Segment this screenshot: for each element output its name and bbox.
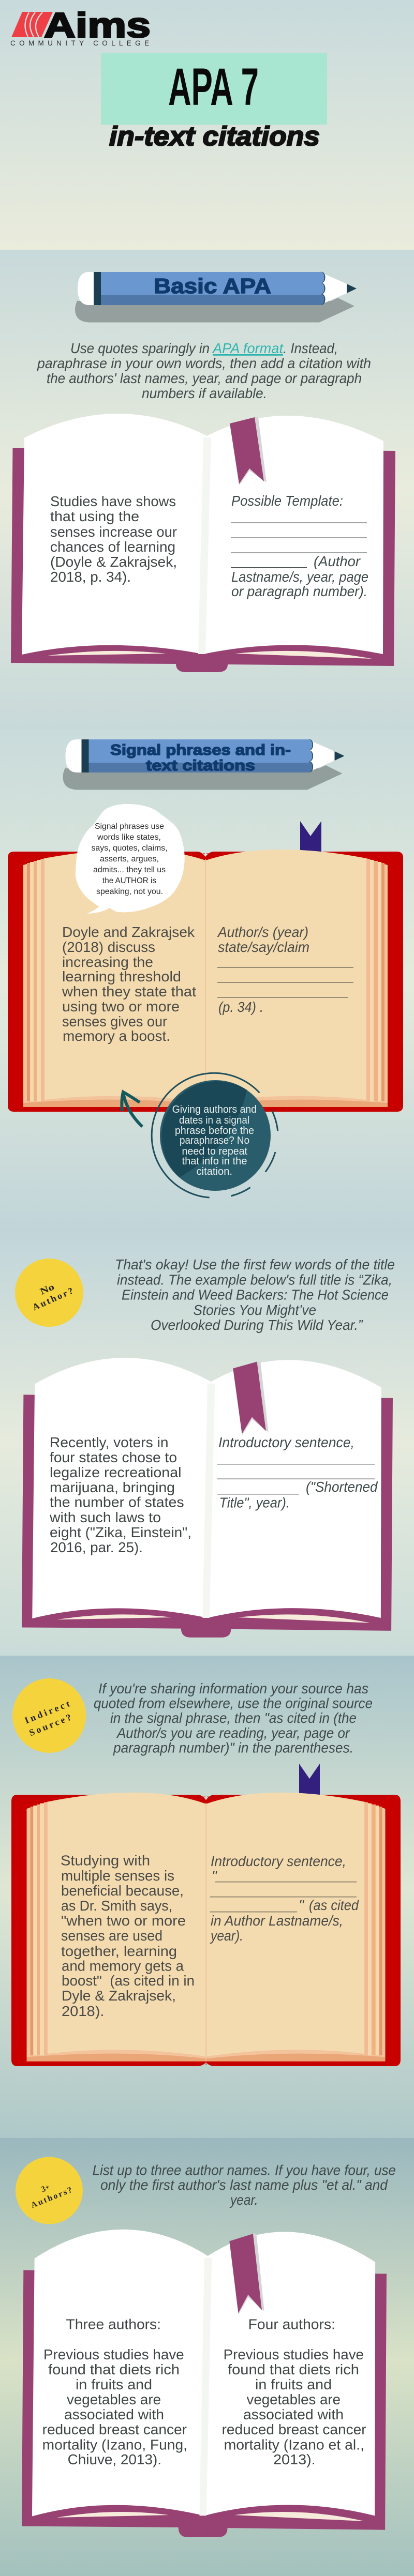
book text: indirect source example: Dyle & Zakrajsek, (62, 1988, 176, 2004)
bookmark: navy ribbon (299, 1764, 320, 1796)
pencil heading: signal phrases and in-text citations: Signal phrases and in- (110, 742, 291, 759)
speech bubble: signal phrases: says, quotes, claims, (91, 844, 168, 853)
speech bubble: signal phrases: asserts, argues, (100, 855, 159, 863)
book text: four authors: Four authors: (248, 2316, 335, 2332)
book text: signal phrase example: using two or more (62, 998, 180, 1014)
intro paragraph: Einstein and Weed Backers: The Hot Science (122, 1287, 389, 1303)
book text: indirect source template: in Author Lastname/s, (211, 1913, 343, 1929)
background: basic APA band (0, 250, 414, 730)
badge: No Author? (15, 1259, 83, 1327)
badge: No Author?: No (38, 1281, 56, 1297)
intro paragraph: . Instead, (283, 340, 338, 356)
book text: indirect source template: (as cited (309, 1897, 359, 1913)
book text: indirect source example: Studying with (61, 1853, 150, 1869)
book text: no author example: with such laws to (49, 1509, 161, 1525)
book text: indirect source example: boost" (as cited in in (62, 1973, 195, 1989)
book text: signal phrase example: increasing the (62, 954, 153, 970)
book text: four authors: mortality (Izano et al., (224, 2437, 364, 2453)
book text: four authors (222, 2316, 366, 2467)
logo: Aims Community College (10, 6, 151, 47)
book text: three authors: Three authors: (66, 2316, 161, 2332)
book text: signal phrase template (217, 924, 353, 1015)
book text: indirect source example: "when two or more (61, 1913, 186, 1929)
book text: indirect source example: 2018). (62, 2003, 105, 2019)
book text: example citation: senses increase our (50, 524, 177, 540)
book text: signal phrase template: state/say/claim (218, 939, 309, 955)
intro paragraph: the authors' last names, year, and page or paragraph (47, 370, 362, 386)
book text: four authors: Previous studies have (224, 2346, 364, 2362)
book text: signal phrase example: learning threshold (62, 968, 181, 984)
subtitle: in-text citations: in-text citations (109, 122, 320, 151)
book text: no author example: four states chose to (50, 1449, 177, 1465)
intro paragraph: Overlooked During This Wild Year.” (151, 1317, 363, 1333)
book text: three authors: found that diets rich (48, 2361, 180, 2377)
book text: possible template: (Author (314, 553, 361, 569)
intro paragraph: paraphrase in your own words, then add a citation with (37, 355, 371, 371)
panel: indirect source (11, 1678, 401, 2066)
background: indirect source band (0, 1656, 414, 2138)
book text: signal phrase example: when they state that (62, 983, 196, 999)
intro paragraph: List up to three author names. If you have four, use (93, 2162, 396, 2178)
pencil heading: Basic APA (75, 272, 357, 323)
book text: indirect source example: and memory gets a (62, 1958, 184, 1974)
book text: indirect source template (210, 1853, 359, 1944)
book text: three authors: mortality (Izano, Fung, (42, 2437, 187, 2453)
book: purple open book (11, 414, 395, 672)
book: red open book (8, 850, 403, 1112)
book text: example citation: Studies have shows (50, 493, 176, 509)
book text: indirect source example: beneficial because, (61, 1883, 184, 1899)
book text: three authors: in fruits and (76, 2376, 152, 2392)
book text: example citation: (Doyle & Zakrajsek, (50, 554, 177, 570)
book text: signal phrase example: Doyle and Zakrajsek (62, 924, 195, 940)
badge: Indirect Source?: Indirect (23, 1698, 71, 1726)
book text: indirect source example: together, learning (61, 1943, 177, 1959)
book text: four authors: reduced breast cancer (222, 2421, 366, 2437)
book text: indirect source example: senses are used (61, 1928, 162, 1944)
badge: 3+ Authors?: Authors? (30, 2186, 73, 2210)
callout: no need to repeat: need to repeat (182, 1146, 247, 1157)
book text: no author template (217, 1434, 378, 1511)
speech bubble: signal phrases: speaking, not you. (96, 887, 163, 896)
book: purple open book (22, 1358, 393, 1638)
intro paragraph: in the signal phrase, then "as cited in (the (110, 1710, 357, 1726)
book text: four authors: 2013). (273, 2451, 316, 2467)
speech bubble: signal phrases: the AUTHOR is (102, 876, 156, 885)
book text: example citation: that using the (50, 508, 139, 524)
intro paragraph: That's okay! Use the first few words of the title (115, 1256, 395, 1272)
book text: possible template: Lastname/s, year, page (231, 569, 368, 585)
speech bubble: signal phrases: words like states, (97, 833, 161, 842)
panel: no author (15, 1256, 395, 1638)
panel: three plus authors (16, 2157, 396, 2537)
book text: indirect source example (61, 1853, 195, 2019)
badge: Indirect Source? (12, 1678, 86, 1753)
book text: no author template: Introductory sentence, (218, 1434, 354, 1450)
background: three plus authors band (0, 2138, 414, 2576)
book text: indirect source template: " (299, 1897, 304, 1913)
book text: four authors: in fruits and (255, 2376, 332, 2392)
book text: indirect source example: multiple senses is (61, 1868, 174, 1884)
callout: no need to repeat: that info in the (182, 1156, 247, 1167)
pencil heading: signal phrases and in-text citations: text citations (146, 757, 255, 774)
panel: basic APA (11, 272, 395, 672)
book text: no author example: 2016, par. 25). (50, 1539, 143, 1555)
speech bubble: signal phrases (76, 804, 185, 914)
book: red open book (11, 1793, 401, 2066)
intro paragraph: paragraph number)" in the parentheses. (113, 1739, 353, 1756)
book text: no author example: eight ("Zika, Einstein", (50, 1524, 191, 1540)
intro paragraph: numbers if available. (142, 385, 267, 401)
badge: No Author?: Author? (31, 1285, 75, 1312)
intro paragraph: only the first author's last name plus "et al." and (100, 2177, 388, 2193)
book text: no author example: marijuana, bringing (50, 1479, 175, 1495)
book text: possible template (231, 493, 368, 599)
book text: signal phrase example: memory a boost. (63, 1028, 170, 1044)
book text: indirect source template: year). (210, 1928, 243, 1944)
book text: example citation: chances of learning (50, 539, 175, 555)
book text: indirect source example: as Dr. Smith says, (61, 1898, 172, 1914)
panel: signal phrases (8, 739, 403, 1198)
intro paragraph: quoted from elsewhere, use the original source (94, 1695, 373, 1711)
logo: Aims Community College: Aims (44, 6, 151, 45)
intro paragraph: APA format (212, 340, 284, 356)
book text: example citation: 2018, p. 34). (50, 569, 131, 585)
book text: three authors (42, 2316, 187, 2467)
background: signal phrases and no author band (0, 730, 414, 1656)
book text: signal phrase example: (2018) discuss (62, 939, 155, 955)
book text: four authors: associated with (243, 2406, 344, 2422)
book text: three authors: associated with (64, 2406, 164, 2422)
intro paragraph: Author/s you are reading, year, page or (116, 1725, 350, 1741)
speech bubble: signal phrases: Signal phrases use (95, 822, 164, 831)
pencil heading: Basic APA: Basic APA (154, 274, 271, 298)
book text: indirect source template: " (212, 1868, 217, 1884)
badge: 3+ Authors?: 3+ (40, 2183, 51, 2194)
panel: header (10, 6, 327, 151)
book text: no author example: the number of states (50, 1494, 184, 1510)
badge: 3+ Authors? (16, 2157, 83, 2224)
intro paragraph (93, 2162, 396, 2208)
book text: three authors: vegetables are (67, 2391, 161, 2407)
book text: example citation (50, 493, 177, 585)
book text: no author example: legalize recreational (50, 1464, 181, 1480)
pencil heading: signal phrases and in-text citations (63, 739, 345, 790)
book text: possible template: Possible Template: (231, 493, 343, 509)
background: header band (0, 0, 414, 250)
book text: indirect source template: Introductory sentence, (211, 1853, 346, 1869)
book: purple open book (22, 2230, 387, 2537)
speech bubble: signal phrases: admits... they tell us (93, 866, 166, 874)
intro paragraph: Use quotes sparingly in (70, 340, 210, 356)
intro paragraph (115, 1256, 395, 1333)
book text: three authors: Chiuve, 2013). (68, 2451, 161, 2467)
intro paragraph (94, 1680, 373, 1756)
intro paragraph: year. (229, 2192, 258, 2208)
book text: no author example (49, 1434, 191, 1555)
logo: Aims Community College: COMMUNITY COLLEGE (10, 39, 149, 47)
bookmark: navy ribbon (300, 821, 321, 853)
book text: signal phrase example (62, 924, 196, 1044)
intro paragraph (37, 340, 371, 401)
book text: signal phrase example: senses gives our (62, 1013, 167, 1029)
book text: four authors: vegetables are (246, 2391, 341, 2407)
book text: four authors: found that diets rich (228, 2361, 359, 2377)
intro paragraph: If you're sharing information your source has (98, 1680, 368, 1696)
book text: three authors: reduced breast cancer (42, 2421, 187, 2437)
title box (101, 53, 327, 125)
book text: no author template: ("Shortened (306, 1479, 378, 1495)
callout: no need to repeat: phrase before the (175, 1125, 254, 1137)
callout: no need to repeat: citation. (197, 1166, 232, 1177)
title: APA 7: APA 7 (168, 57, 259, 116)
callout: no need to repeat (152, 1073, 278, 1198)
book text: signal phrase template: (p. 34) . (218, 999, 263, 1015)
book text: no author template: Title", year). (219, 1495, 290, 1511)
intro paragraph: instead. The example below's full title is “Zika, (117, 1272, 392, 1288)
intro paragraph: Stories You Might’ve (194, 1302, 316, 1318)
book text: signal phrase template: Author/s (year) (217, 924, 308, 940)
callout: no need to repeat: paraphrase? No (180, 1135, 249, 1146)
badge: Indirect Source?: Source? (27, 1712, 73, 1738)
callout: no need to repeat: Giving authors and (172, 1104, 257, 1115)
arrow: points to the signal phrase (122, 1092, 142, 1127)
book text: no author example: Recently, voters in (50, 1434, 169, 1450)
book text: three authors: Previous studies have (43, 2346, 184, 2362)
book text: possible template: or paragraph number). (231, 583, 367, 599)
callout: no need to repeat: dates in a signal (179, 1115, 249, 1126)
